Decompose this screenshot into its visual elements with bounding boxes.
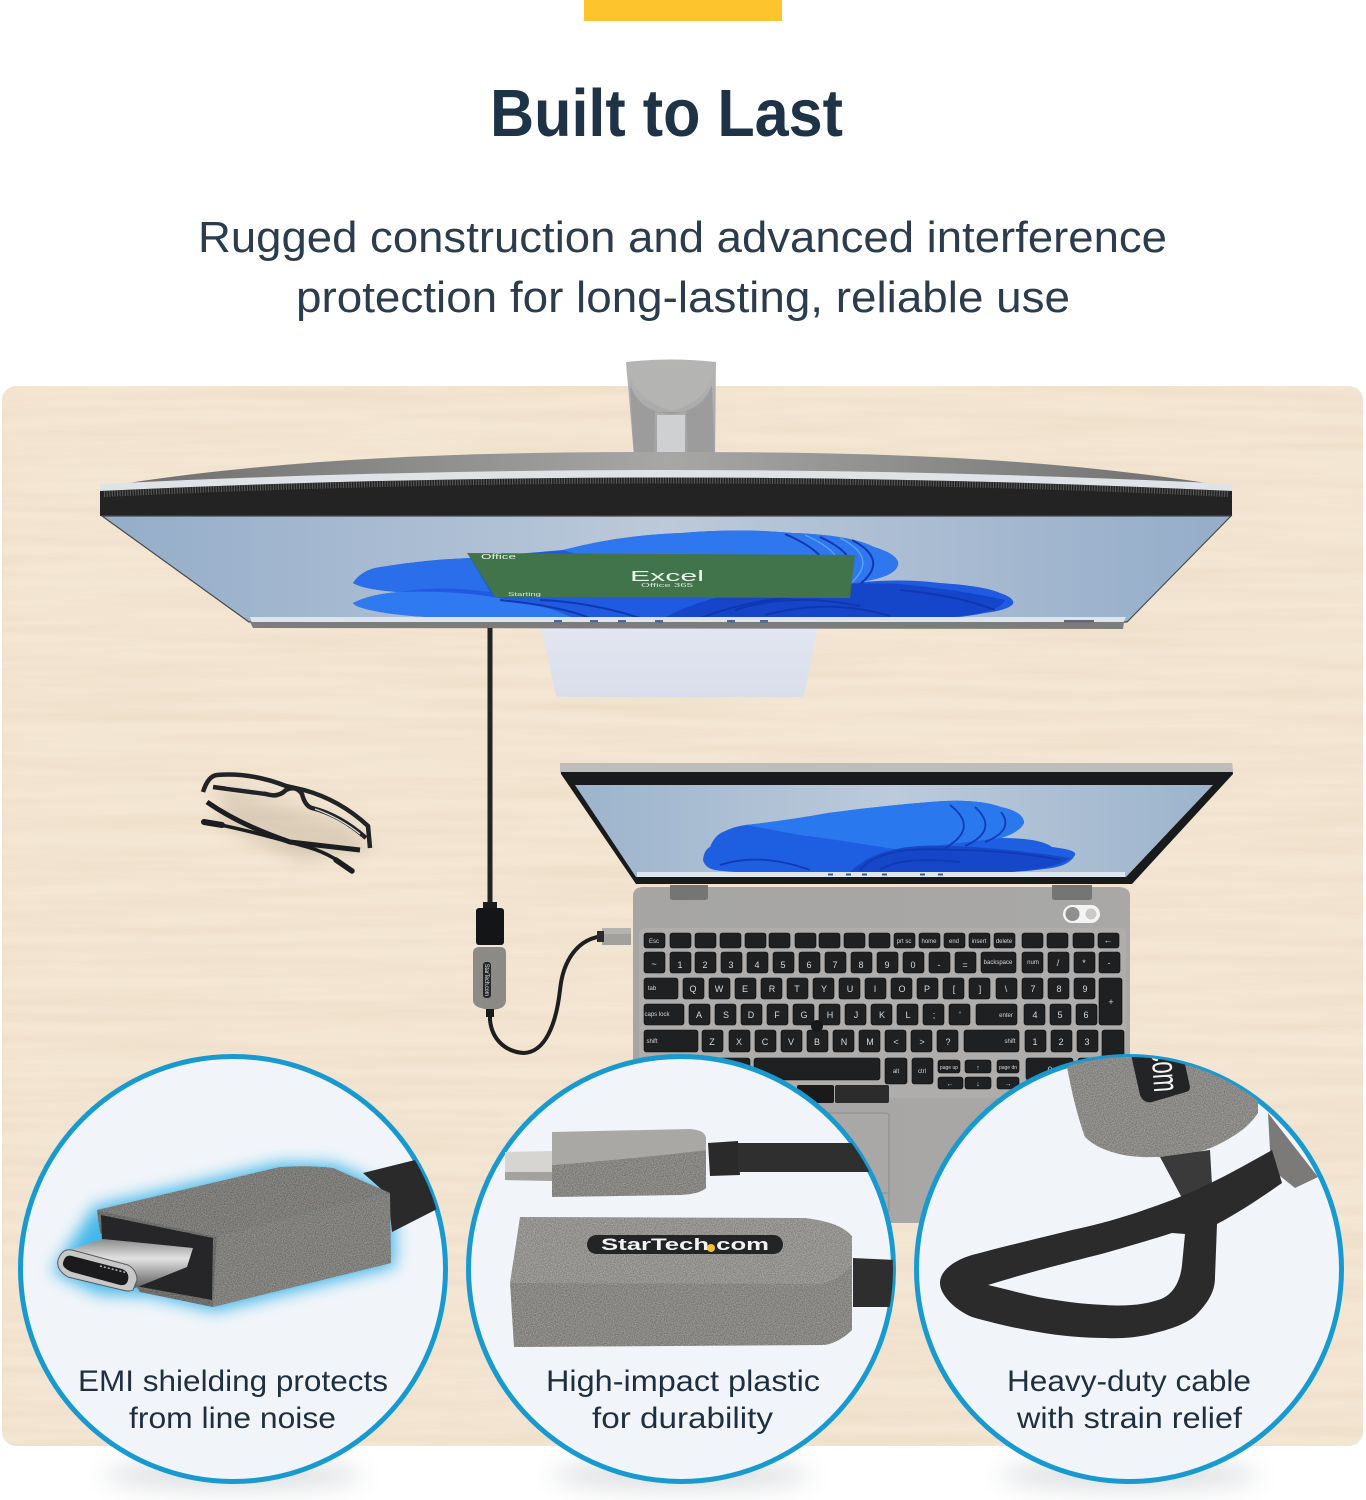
- home row: enter: [999, 1013, 1013, 1019]
- number row: 7: [832, 960, 838, 970]
- number row: /: [1057, 958, 1060, 968]
- number row: 8: [858, 960, 864, 970]
- connector opening: [101, 1215, 213, 1300]
- qwerty row: I: [874, 984, 876, 994]
- laptop base: [633, 887, 1130, 1223]
- space row: →: [1004, 1081, 1012, 1088]
- bottom letter row: <: [893, 1037, 899, 1047]
- home row: 6: [1083, 1010, 1089, 1020]
- number row: -: [938, 960, 940, 970]
- qwerty row: 8: [1056, 984, 1062, 994]
- number row: [644, 952, 1120, 973]
- bottom letter row: X: [736, 1037, 742, 1047]
- qwerty row: P: [924, 984, 930, 994]
- bottom letter row: C: [762, 1037, 769, 1047]
- strain relief: [1160, 1150, 1212, 1198]
- laptop lid: [560, 764, 1233, 884]
- qwerty row: [: [953, 984, 956, 994]
- space row: page up: [940, 1065, 958, 1071]
- bottom letter row: M: [866, 1037, 874, 1047]
- qwerty row: 7: [1030, 984, 1036, 994]
- caption: Heavy-duty cable: [1007, 1365, 1251, 1398]
- bottom letter row: B: [814, 1037, 820, 1047]
- usb-c plug: [597, 928, 631, 945]
- home row: J: [854, 1010, 858, 1020]
- bottom letter row: [644, 1030, 1124, 1080]
- qwerty row: Q: [689, 984, 697, 994]
- bottom letter row: ?: [945, 1037, 951, 1047]
- function row: delete: [996, 939, 1013, 945]
- space row: ctrl: [918, 1069, 926, 1075]
- second adapter edge: [1268, 1113, 1318, 1188]
- callout: emi shielding: [20, 1056, 446, 1482]
- number row: =: [962, 960, 968, 970]
- bottom letter row: Z: [709, 1037, 715, 1047]
- lower cable: [853, 1258, 895, 1307]
- laptop hinges: [670, 885, 1092, 900]
- office splash window: Starting: [508, 592, 541, 598]
- cable loop: [940, 1150, 1282, 1338]
- function row: insert: [972, 939, 987, 945]
- adapters illustration: [505, 1129, 895, 1347]
- title: Built to Last: [490, 76, 843, 151]
- startech label: StarTech.com: [601, 1235, 769, 1254]
- home row: ;: [933, 1010, 935, 1020]
- callout: high-impact plastic: [468, 1056, 895, 1482]
- usb-c cable loop: [490, 936, 604, 1053]
- adapter label: .com: [1143, 1043, 1186, 1093]
- home row: caps lock: [644, 1012, 671, 1018]
- keyboard: [644, 933, 1124, 1089]
- qwerty row: [644, 978, 1122, 1025]
- number row: -: [1108, 958, 1110, 968]
- metal plug: [58, 1239, 193, 1291]
- panel: wooden desk: [2, 386, 1363, 1446]
- qwerty row: T: [794, 984, 800, 994]
- home row: ': [959, 1010, 961, 1020]
- gray adapter body: [1067, 1052, 1258, 1157]
- laptop taskbar: [637, 872, 1125, 877]
- cable: [363, 1160, 436, 1232]
- accent bar: [584, 0, 782, 21]
- qwerty row: O: [898, 984, 906, 994]
- wallpaper bloom: [353, 530, 1013, 620]
- home row: [644, 1004, 1097, 1025]
- number row: 2: [702, 960, 708, 970]
- monitor back: [108, 452, 1226, 486]
- caption: [1007, 1365, 1251, 1435]
- number row: 9: [884, 960, 890, 970]
- home row: G: [800, 1010, 808, 1020]
- bottom letter row: V: [788, 1037, 794, 1047]
- hdmi connector: [476, 902, 504, 945]
- lower adapter: [510, 1217, 852, 1347]
- connector body: [97, 1166, 391, 1307]
- subtitle: protection for long-lasting, reliable use: [296, 273, 1070, 322]
- function row: ←: [1104, 935, 1112, 945]
- fingerprint power button: [1063, 905, 1100, 923]
- monitor stand base: [541, 628, 818, 697]
- adapter label: [1132, 1057, 1190, 1102]
- startech label: [587, 1235, 783, 1254]
- qwerty row: ]: [979, 984, 981, 994]
- bottom letter row: 1: [1032, 1037, 1038, 1047]
- subtitle: [198, 213, 1167, 322]
- bottom letter row: 3: [1084, 1037, 1090, 1047]
- hdmi cable: [488, 628, 492, 906]
- caption: EMI shielding protects: [78, 1365, 388, 1398]
- number row: 3: [728, 960, 734, 970]
- home row: 4: [1032, 1010, 1038, 1020]
- monitor bezel: [100, 478, 1232, 516]
- number row: num: [1027, 960, 1039, 966]
- qwerty row: Y: [821, 984, 827, 994]
- upper cable: [708, 1141, 880, 1176]
- space row: ←: [946, 1081, 954, 1088]
- caption: High-impact plastic: [546, 1365, 820, 1398]
- bottom letter row: shift: [1004, 1039, 1016, 1045]
- space row: alt: [893, 1069, 899, 1075]
- qwerty row: 9: [1082, 984, 1088, 994]
- number row: 4: [754, 960, 760, 970]
- qwerty row: W: [715, 984, 724, 994]
- monitor: [100, 360, 1232, 697]
- callout: heavy-duty cable: [916, 1043, 1342, 1482]
- keyboard recess: [639, 928, 1126, 1098]
- qwerty row: E: [742, 984, 748, 994]
- caption: for durability: [592, 1402, 773, 1435]
- connector illustration: [58, 1160, 445, 1307]
- trackpad buttons: [797, 1085, 889, 1103]
- number row: 0: [910, 960, 916, 970]
- space row: ↓: [976, 1081, 980, 1088]
- laptop screen: [575, 785, 1213, 877]
- space row: ↑: [976, 1065, 980, 1072]
- qwerty row: +: [1108, 997, 1114, 1007]
- home row: S: [723, 1010, 729, 1020]
- monitor screen: [102, 516, 1231, 622]
- space row: page dn: [999, 1065, 1017, 1071]
- function row: prt sc: [897, 939, 911, 945]
- adapter: StarTech.com: [483, 964, 489, 996]
- office splash window: Office: [481, 554, 516, 561]
- laptop wallpaper bloom: [703, 801, 1075, 873]
- function row: home: [921, 939, 937, 945]
- subtitle: Rugged construction and advanced interference: [198, 213, 1167, 262]
- space row: [680, 1058, 1100, 1089]
- caption: [78, 1365, 388, 1435]
- home row: K: [879, 1010, 885, 1020]
- glasses: [203, 774, 372, 871]
- space row: 0: [1047, 1065, 1053, 1075]
- qwerty row: \: [1005, 984, 1008, 994]
- home row: D: [748, 1010, 755, 1020]
- qwerty row: U: [847, 984, 853, 994]
- bottom letter row: shift: [646, 1039, 658, 1045]
- circle shadows: [103, 1461, 1259, 1489]
- function row: [644, 933, 1119, 948]
- qwerty row: R: [769, 984, 776, 994]
- monitor neck: [626, 360, 716, 456]
- home row: L: [905, 1010, 911, 1020]
- taskbar: [250, 617, 1126, 629]
- number row: backspace: [984, 960, 1013, 966]
- caption: with strain relief: [1016, 1402, 1243, 1435]
- home row: F: [774, 1010, 780, 1020]
- number row: 1: [677, 960, 683, 970]
- home row: 5: [1057, 1010, 1063, 1020]
- office splash window: Office 365: [641, 583, 693, 589]
- caption: from line noise: [129, 1402, 336, 1435]
- number row: 6: [806, 960, 812, 970]
- bottom letter row: N: [841, 1037, 847, 1047]
- home row: H: [827, 1010, 833, 1020]
- qwerty row: tab: [648, 986, 657, 992]
- home row: A: [696, 1010, 702, 1020]
- function row: Esc: [649, 939, 659, 945]
- office splash window: Excel: [630, 568, 704, 585]
- caption: [546, 1365, 820, 1435]
- laptop: [560, 763, 1233, 1223]
- number row: 5: [780, 960, 786, 970]
- office splash window: [467, 553, 855, 598]
- number row: ~: [651, 959, 657, 969]
- bottom letter row: 2: [1058, 1037, 1064, 1047]
- number row: *: [1082, 958, 1086, 968]
- monitor top edge: [100, 470, 1232, 492]
- function row: end: [949, 939, 959, 945]
- trackpad: [790, 1113, 889, 1213]
- adapter: [473, 947, 506, 1017]
- cable illustration: [940, 1043, 1318, 1338]
- blue glow: [58, 1167, 391, 1307]
- bottom letter row: >: [919, 1037, 925, 1047]
- trackpoint: [811, 1020, 823, 1032]
- upper plug: [505, 1129, 706, 1197]
